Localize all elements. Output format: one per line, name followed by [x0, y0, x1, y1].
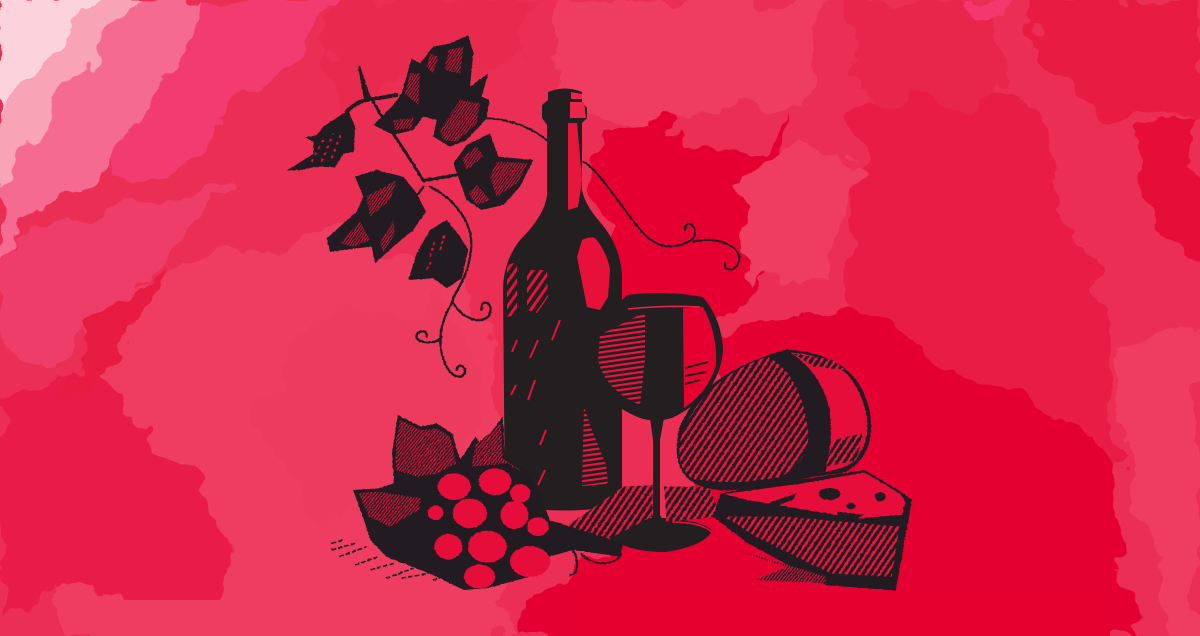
vine with leaves	[287, 35, 739, 377]
bottle handle gap	[577, 237, 610, 310]
grape tendril	[569, 550, 621, 575]
ground shadow	[713, 543, 826, 583]
bottle label highlight	[527, 270, 548, 313]
glass bowl	[588, 293, 723, 420]
background: bottom edge light patch	[90, 600, 490, 636]
grape cluster	[428, 468, 550, 589]
leaf: lower left	[327, 170, 426, 263]
background: bottom edge dark patch	[570, 590, 1110, 636]
table and cheese and grapes	[332, 349, 912, 591]
cheese wedge	[713, 470, 912, 591]
wine glass	[588, 293, 723, 552]
bottle lower reflection	[582, 406, 608, 486]
table shadow hatching	[550, 485, 721, 547]
bottle neck highlight	[568, 123, 582, 210]
leaf: right	[453, 133, 533, 210]
wine bottle	[503, 88, 622, 510]
glass foot	[600, 518, 712, 552]
leaf: lower centre	[408, 220, 468, 288]
glass stem	[650, 418, 664, 522]
grape leaves hatch	[353, 415, 623, 590]
cheese wheel	[677, 349, 871, 490]
vine stems	[347, 66, 739, 377]
leaf: far left	[287, 110, 355, 171]
leaf: top	[373, 35, 489, 147]
grape shadow hatching	[332, 540, 452, 580]
